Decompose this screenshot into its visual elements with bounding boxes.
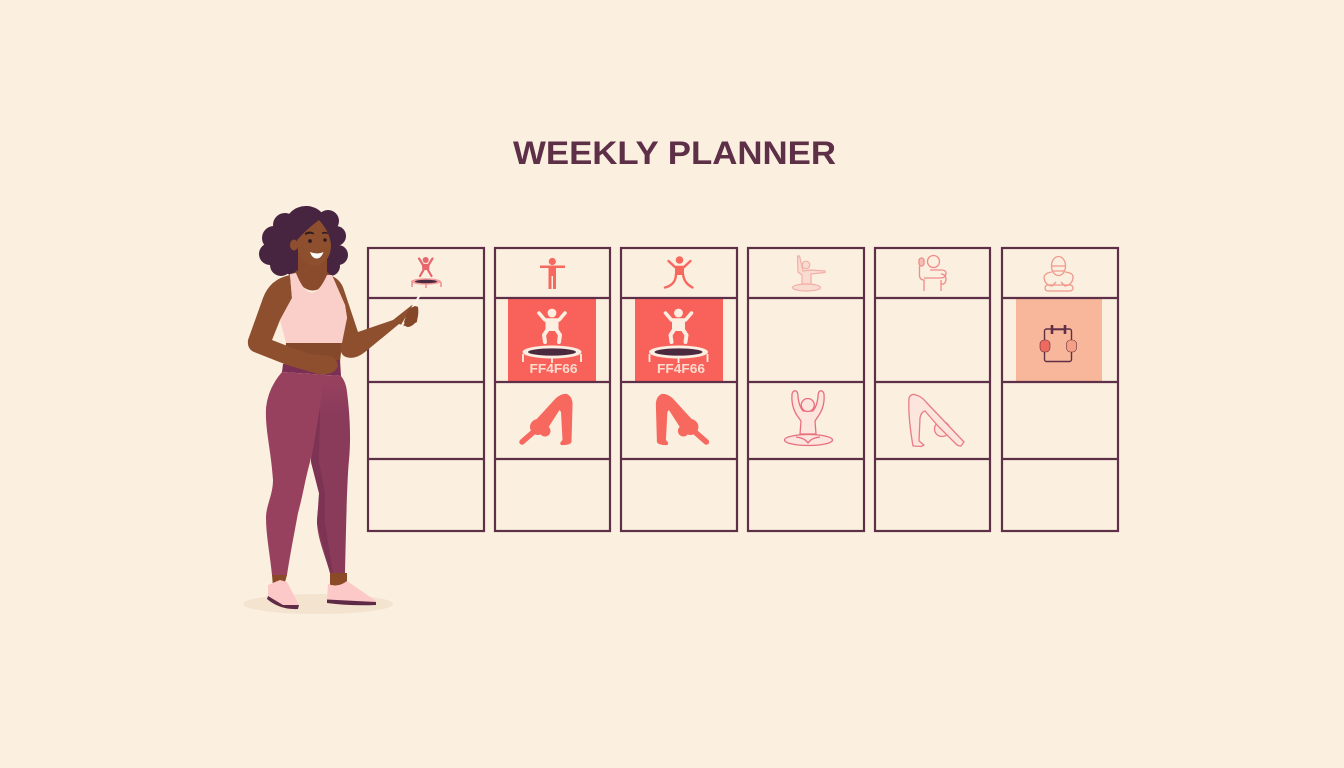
crop top xyxy=(280,273,347,343)
figure: presenter xyxy=(243,206,421,614)
icon: downward dog solid, Tuesday xyxy=(522,394,573,445)
shadow xyxy=(243,594,393,614)
icon: seated arms raised outline, column 4 xyxy=(784,391,832,446)
smile xyxy=(310,252,324,259)
icon: small trampoline jumper, column 1 xyxy=(411,257,441,288)
pointing hand xyxy=(404,306,418,327)
shoe soles xyxy=(267,596,376,609)
left arm xyxy=(248,275,338,374)
pointer xyxy=(401,293,421,327)
leggings left leg xyxy=(266,372,325,575)
icon: outline figure raised arm, column 5 xyxy=(919,256,946,291)
cell fill: red session Tuesday xyxy=(508,299,596,382)
panel: weekly grid xyxy=(368,248,1118,531)
icon: large trampoline jumper, Wednesday xyxy=(649,309,708,363)
leggings right leg xyxy=(310,374,350,573)
title: WEEKLY PLANNER xyxy=(513,135,836,171)
cell fill: peach session Saturday xyxy=(1016,299,1102,382)
ankles xyxy=(272,573,347,587)
icon: seated yoga pale, column 4 xyxy=(792,256,825,291)
neck xyxy=(292,252,332,291)
icon: downward dog solid, Wednesday xyxy=(656,394,706,445)
hair xyxy=(259,206,348,276)
right arm xyxy=(332,276,418,358)
ear xyxy=(290,240,298,250)
right shoe xyxy=(327,581,376,603)
left shoe xyxy=(268,580,299,607)
label: FF4F66 Wednesday: FF4F66 xyxy=(657,361,705,376)
icon: dumbbell clipboard, Saturday xyxy=(1040,325,1076,362)
inner leg shade xyxy=(311,407,333,573)
icon: jumping figure, column 3 xyxy=(665,256,692,288)
face xyxy=(297,220,331,266)
midriff xyxy=(284,343,342,367)
label: FF4F66 Tuesday: FF4F66 xyxy=(530,361,578,376)
grid lines xyxy=(368,248,1118,531)
icon: outline seated figure, column 6 xyxy=(1044,256,1073,291)
icon: large trampoline jumper, Tuesday xyxy=(522,309,582,363)
cell fill: red session Wednesday xyxy=(635,299,723,382)
waistband xyxy=(282,360,341,376)
brows and eyes xyxy=(305,232,328,243)
icon: standing figure, column 2 xyxy=(540,258,565,289)
icon: downward dog outline, column 5 xyxy=(909,394,964,446)
